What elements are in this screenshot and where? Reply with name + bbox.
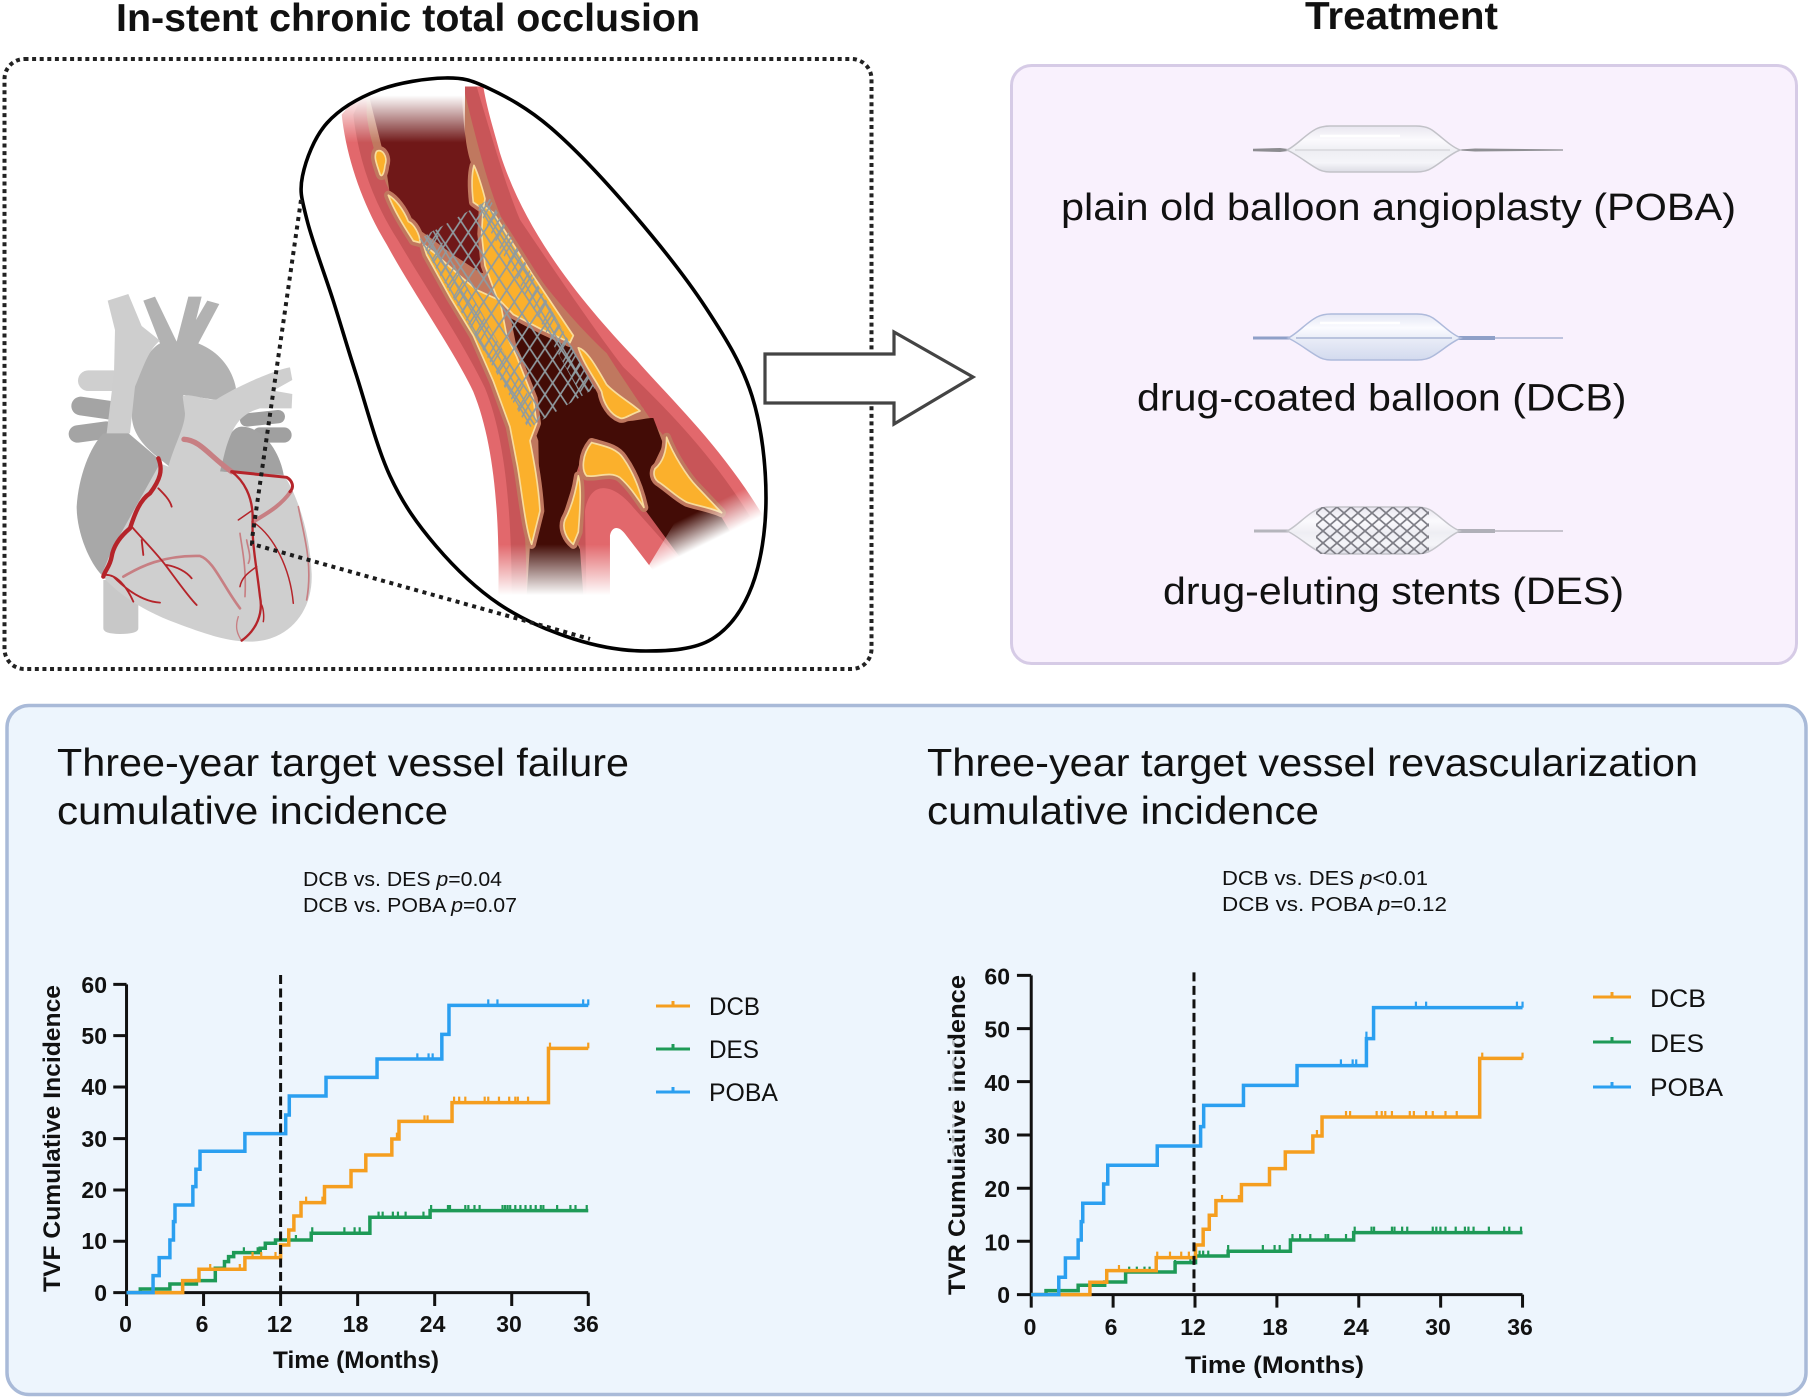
- artery outer wall: [342, 86, 763, 609]
- legend: [1593, 985, 1723, 1102]
- DCB curve: [127, 1043, 588, 1293]
- legend: DES: [709, 1036, 759, 1064]
- y-axis tick labels: 50: [984, 1016, 1010, 1042]
- y-axis tick labels: 50: [81, 1023, 107, 1049]
- heading: TVR: cumulative incidence: [927, 790, 1319, 833]
- intima layer: [367, 86, 737, 595]
- illustration: occluded artery with stent: [333, 83, 780, 616]
- y-axis tick labels: [984, 964, 1010, 1308]
- x-axis tick labels: 12: [267, 1311, 292, 1337]
- icon: drug-coated balloon: [1253, 314, 1563, 360]
- legend: DCB: [709, 993, 760, 1021]
- text: TVR p values: DCB vs. POBA p=0.12: [1222, 894, 1447, 916]
- x-axis tick labels: [1024, 1314, 1533, 1340]
- callout: lens outline: [301, 78, 766, 651]
- y-axis tick labels: 0: [94, 1280, 107, 1306]
- label: POBA: plain old balloon angioplasty (POBA): [1061, 187, 1736, 229]
- icon: drug-eluting stent on balloon: [1254, 507, 1563, 554]
- DES curve: [1031, 1227, 1523, 1295]
- text: TVR p values: [1222, 868, 1447, 916]
- y-axis tick labels: 30: [984, 1123, 1010, 1149]
- text: TVF p values: DCB vs. DES p=0.04: [303, 869, 502, 891]
- text: TVF p values: [303, 869, 517, 917]
- label: DCB: drug-coated balloon (DCB): [1137, 378, 1626, 420]
- x-axis tick labels: 18: [1262, 1314, 1288, 1340]
- x-axis tick labels: 12: [1180, 1314, 1206, 1340]
- legend: POBA: [1650, 1074, 1723, 1102]
- y-axis tick labels: 20: [984, 1176, 1010, 1202]
- chart: TVF cumulative incidence: [39, 972, 778, 1374]
- x-axis tick labels: 0: [119, 1311, 132, 1337]
- panel: occlusion illustration frame: [4, 59, 872, 669]
- x-axis tick labels: 24: [1343, 1314, 1369, 1340]
- heading: TVF: [57, 742, 629, 833]
- POBA curve: [1031, 1002, 1523, 1295]
- text: TVF p values: DCB vs. POBA p=0.07: [303, 895, 517, 917]
- x-axis tick labels: 0: [1024, 1314, 1036, 1340]
- y-axis tick labels: 10: [81, 1228, 107, 1254]
- callout: magnified artery lens: [301, 78, 766, 651]
- 12-month landmark line: [279, 975, 282, 1293]
- icon: heart with coronary arteries: [77, 294, 312, 642]
- heading: TVF: Three-year target vessel failure: [57, 742, 629, 785]
- heading: TVF: cumulative incidence: [57, 790, 448, 833]
- y-axis tick labels: 40: [81, 1074, 107, 1100]
- y-axis tick labels: 30: [81, 1126, 107, 1152]
- x-axis tick labels: 30: [496, 1311, 522, 1337]
- y-axis tick labels: 60: [984, 964, 1010, 990]
- chart: TVR cumulative incidence: [944, 964, 1723, 1379]
- curves and axes: [1017, 972, 1523, 1308]
- x-axis title: Time (Months): [273, 1347, 439, 1374]
- connector: zoom dotted lines: [252, 200, 590, 639]
- y-axis tick labels: 0: [997, 1282, 1010, 1308]
- legend: POBA: [709, 1079, 778, 1107]
- text: TVR p values: DCB vs. DES p<0.01: [1222, 868, 1428, 890]
- icon: plain balloon: [1253, 126, 1563, 172]
- vessel end fades: [333, 83, 780, 616]
- panel: treatment: [1012, 66, 1796, 664]
- y-axis tick labels: [81, 972, 107, 1306]
- plaque halos: [375, 151, 722, 544]
- DES curve: [127, 1205, 588, 1293]
- heading: TVR: [927, 742, 1698, 833]
- x-axis tick labels: 18: [343, 1311, 369, 1337]
- x-axis tick labels: 6: [1105, 1314, 1117, 1340]
- curves and axes: [113, 975, 588, 1306]
- heading: TVR: Three-year target vessel revascularization: [927, 742, 1698, 785]
- label: DES: drug-eluting stents (DES): [1163, 571, 1624, 613]
- plaque deposits: [375, 151, 722, 544]
- legend: DCB: [1650, 985, 1706, 1013]
- y-axis tick labels: 20: [81, 1177, 107, 1203]
- lower lumen: [510, 315, 737, 595]
- legend: DES: [1650, 1030, 1704, 1058]
- y-axis tick labels: 40: [984, 1070, 1010, 1096]
- x-axis tick labels: 36: [1507, 1314, 1533, 1340]
- stent mesh: [419, 199, 595, 429]
- x-axis title: Time (Months): [1185, 1352, 1364, 1379]
- arrow: occlusion to treatment: [765, 332, 973, 424]
- DCB curve: [1031, 1053, 1523, 1295]
- POBA curve: [127, 999, 588, 1293]
- x-axis tick labels: 36: [573, 1311, 599, 1337]
- y-axis tick labels: 10: [984, 1230, 1010, 1256]
- upper lumen: [367, 86, 493, 276]
- panel: outcomes: [7, 706, 1806, 1394]
- y-axis tick labels: 60: [81, 972, 107, 998]
- y-axis title: TVF Cumulative Incidence: [39, 985, 66, 1292]
- x-axis tick labels: 30: [1425, 1314, 1451, 1340]
- x-axis tick labels: 6: [196, 1311, 208, 1337]
- x-axis tick labels: 24: [420, 1311, 446, 1337]
- legend: [656, 993, 778, 1107]
- artery inner wall: [353, 86, 750, 606]
- y-axis title: TVR Cumulative Incidence: [944, 975, 971, 1295]
- 12-month landmark line: [1192, 972, 1195, 1295]
- x-axis tick labels: [119, 1311, 599, 1337]
